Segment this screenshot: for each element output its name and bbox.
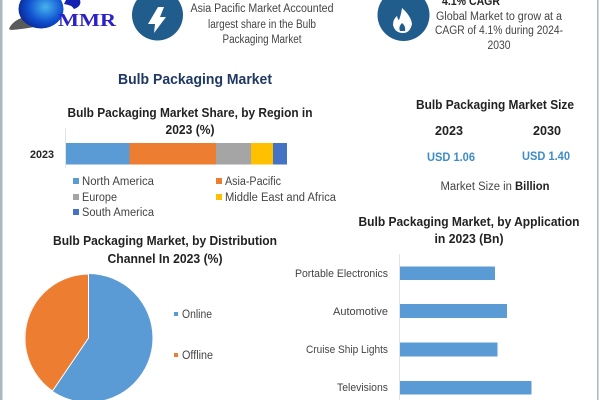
market size 2030: 2030 — [533, 124, 561, 138]
callout: Asia Pacific share: largest share in the Bulb — [208, 19, 316, 31]
market size unit note: Market Size in Billion — [440, 181, 550, 193]
legend: regions: Europe — [82, 192, 117, 204]
heading: distribution channel chart: Bulb Packaging Market, by Distribution — [53, 233, 277, 248]
heading: region share chart: 2023 (%) — [166, 122, 214, 137]
legend: regions: Middle East and Africa — [225, 192, 337, 204]
legend: regions: North America — [82, 176, 155, 188]
bar chart: application: Automotive — [333, 306, 388, 318]
heading: application chart — [358, 214, 580, 246]
callout: Asia Pacific share — [190, 3, 334, 46]
bar chart: application: Televisions — [337, 382, 388, 394]
heading: region share chart — [68, 105, 313, 137]
stacked bar chart: region share — [30, 128, 287, 168]
market size 2030: USD 1.40 — [522, 151, 570, 163]
bar chart: application: Cruise Ship Lights — [306, 344, 388, 356]
heading: application chart: Bulb Packaging Market, by Application — [358, 214, 580, 229]
bar chart: application: Portable Electronics — [295, 268, 388, 280]
heading: region share chart: Bulb Packaging Market Share, by Region in — [68, 105, 313, 120]
stacked bar chart: region share: 2023 — [30, 149, 54, 161]
heading: distribution channel chart: Channel In 2023 (%) — [108, 251, 222, 266]
legend: channels: Online — [182, 309, 212, 321]
legend: channels: Offline — [182, 350, 213, 362]
logo: MMR: MMR — [58, 10, 117, 30]
market size 2023: 2023 — [435, 124, 463, 138]
callout: CAGR: CAGR of 4.1% during 2024- — [435, 25, 563, 37]
callout: CAGR: 2030 — [488, 40, 510, 52]
icon: flame — [378, 0, 430, 41]
logo: MMR — [9, 0, 117, 30]
legend: regions: South America — [82, 207, 155, 219]
market size 2023 — [427, 124, 475, 164]
callout: Asia Pacific share: Packaging Market — [222, 34, 302, 46]
heading: application chart: in 2023 (Bn) — [434, 231, 504, 246]
icon: lightning bolt — [132, 0, 183, 40]
callout: Asia Pacific share: Asia Pacific Market Accounted — [190, 3, 334, 15]
market size 2030 — [522, 124, 570, 163]
callout: CAGR: Global Market to grow at a — [436, 11, 563, 23]
pie chart: distribution channel — [24, 274, 152, 400]
bar chart: application — [295, 254, 532, 400]
legend: regions — [73, 176, 337, 219]
legend: regions: Asia-Pacific — [225, 176, 281, 188]
heading: distribution channel chart — [53, 233, 277, 266]
callout: CAGR — [435, 0, 563, 52]
market size 2023: USD 1.06 — [427, 152, 475, 164]
main title: Bulb Packaging Market — [118, 71, 272, 88]
heading: market size: Bulb Packaging Market Size — [416, 97, 574, 112]
legend: channels — [174, 309, 213, 362]
